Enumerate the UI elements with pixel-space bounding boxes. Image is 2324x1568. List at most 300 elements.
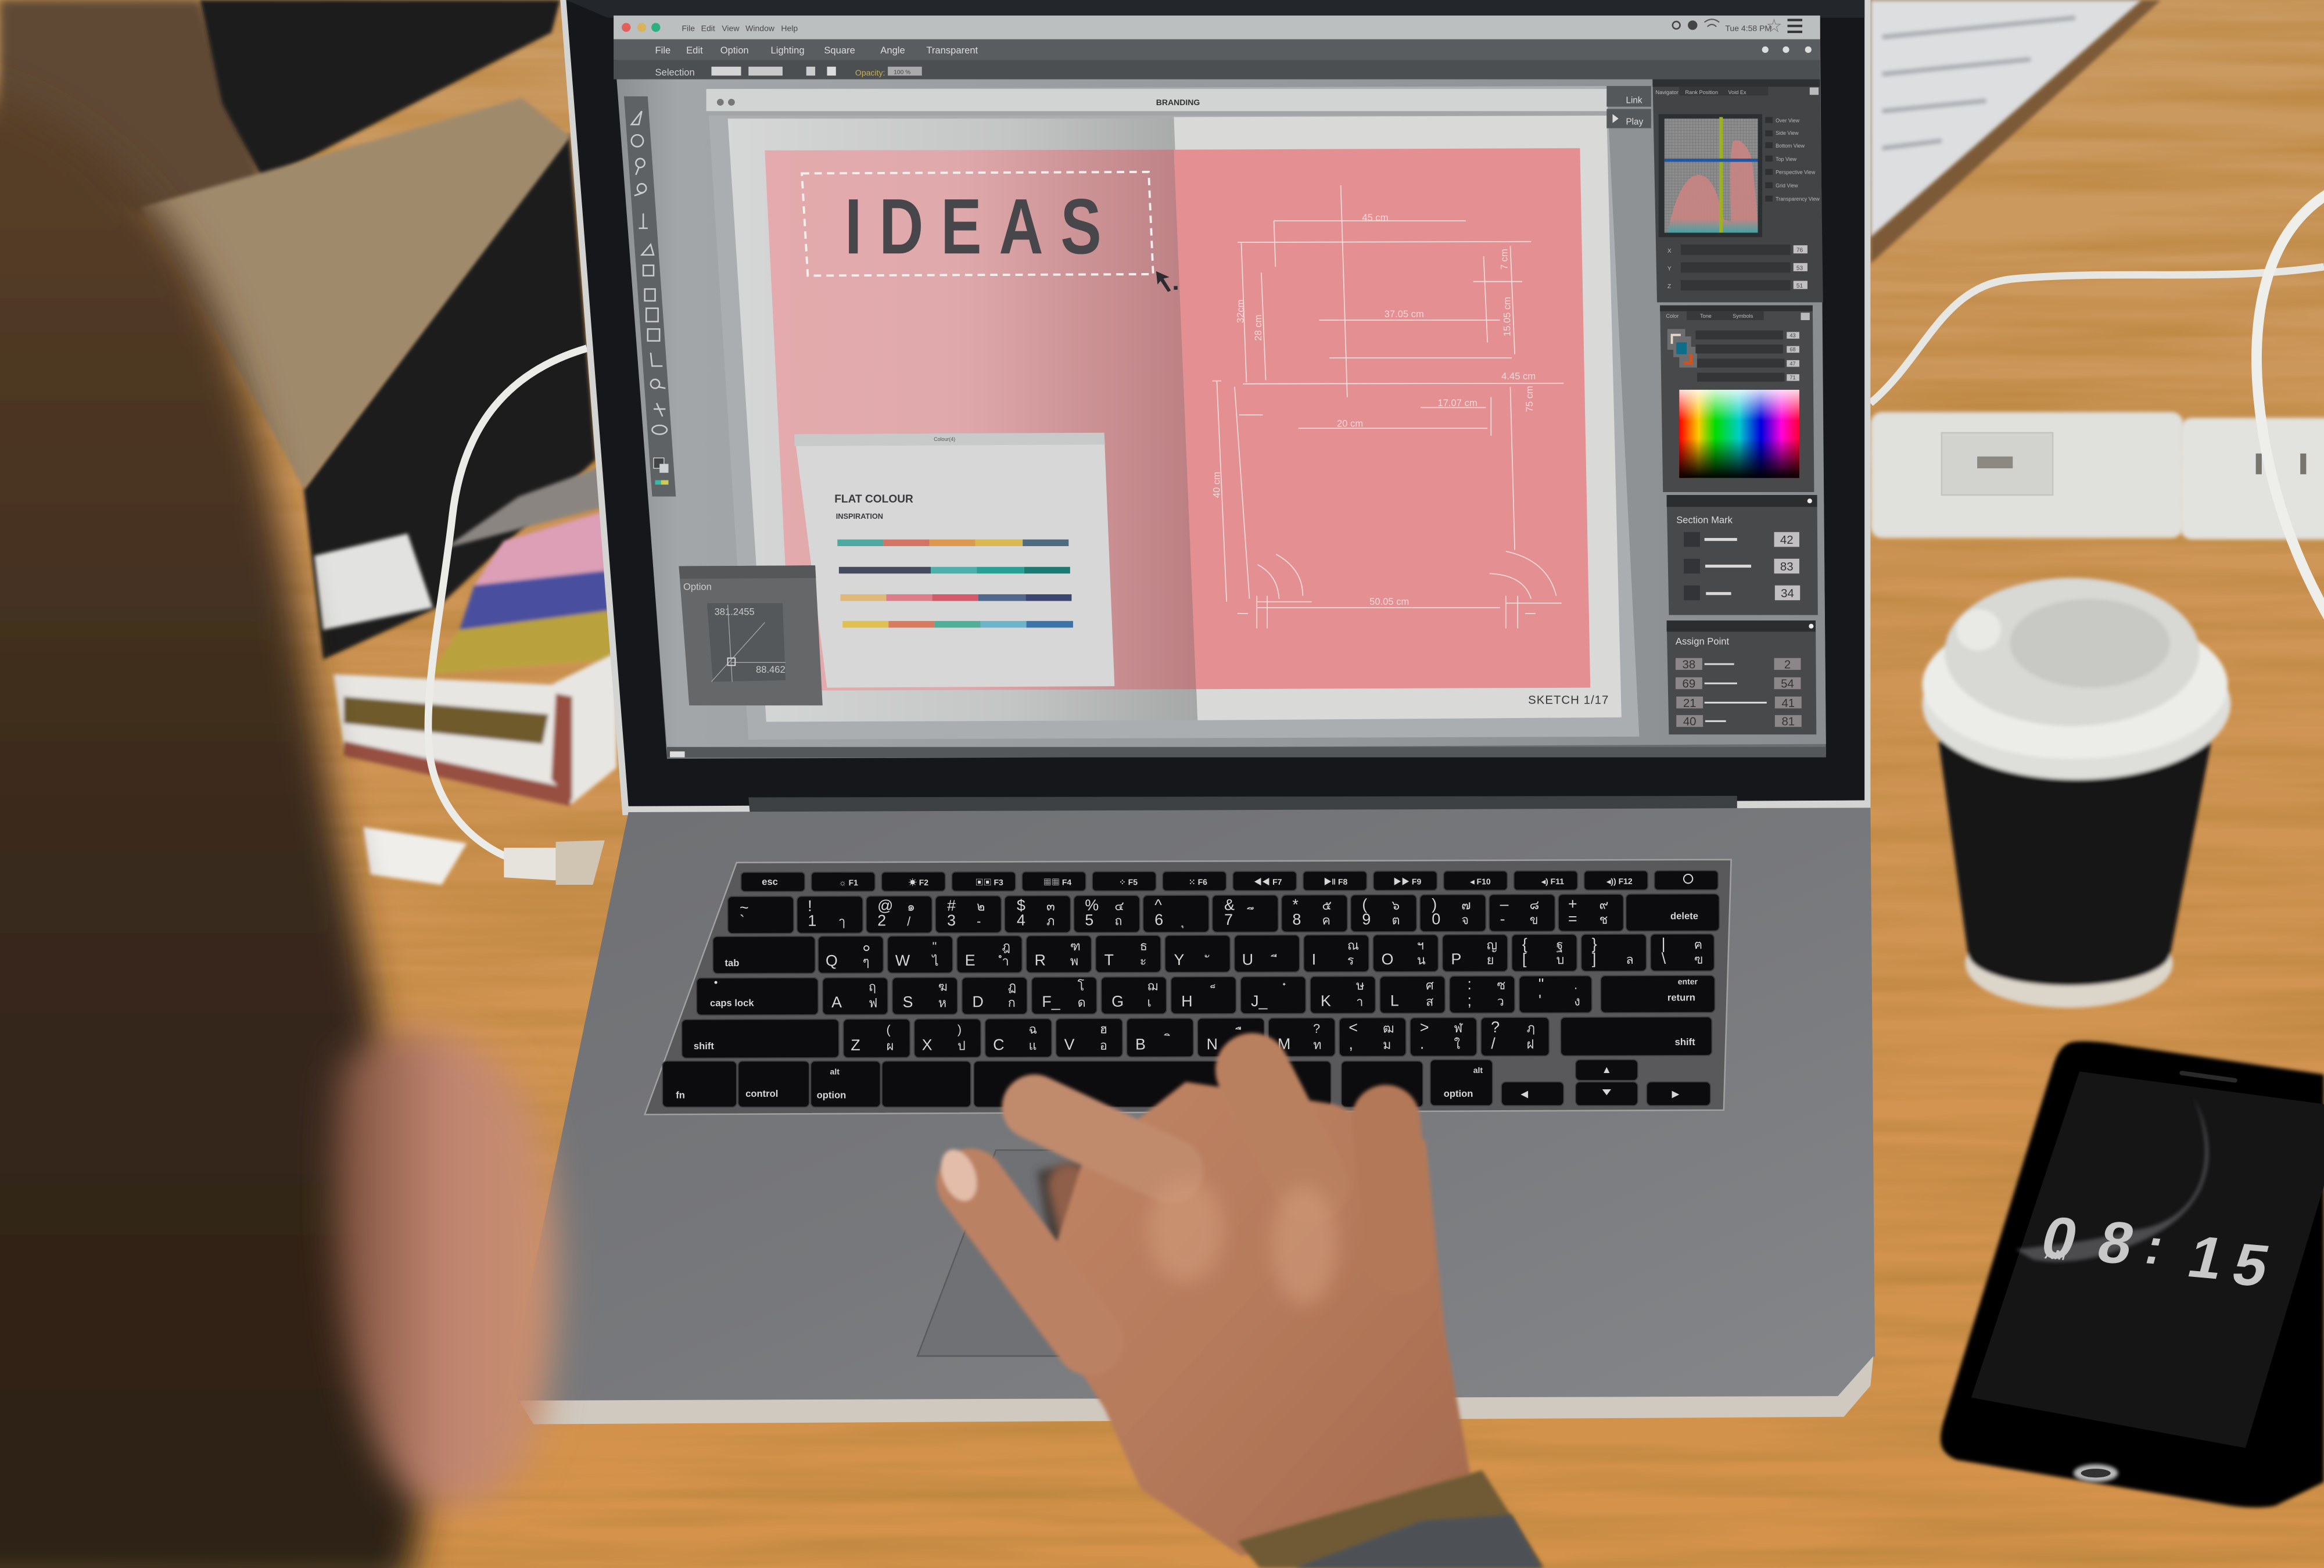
QWERTY key row: R — [1035, 952, 1046, 969]
bottom letter row: ฬ — [1454, 1021, 1464, 1035]
colour sliders — [1695, 331, 1799, 382]
assign point panel — [1667, 620, 1816, 734]
document window — [706, 86, 1639, 740]
color panel — [1660, 306, 1814, 492]
navigator panel: Rank Position — [1685, 89, 1718, 95]
modifier key row: control — [745, 1088, 778, 1099]
paper tag — [363, 827, 467, 885]
number key row: ๘ — [1530, 898, 1539, 912]
modifier key row: fn — [676, 1089, 685, 1100]
function key row: esc — [762, 876, 778, 887]
home key row: ว — [1497, 994, 1504, 1009]
number key row: = — [1568, 910, 1577, 927]
QWERTY key row: P — [1451, 950, 1461, 968]
assign point panel: 2 — [1784, 659, 1791, 672]
option panel: Option — [683, 581, 712, 592]
clock digits: 8 — [2091, 1208, 2141, 1276]
blueprint drawing: 40 cm — [1211, 472, 1222, 498]
XYZ sliders: 51 — [1796, 283, 1803, 289]
bottom letter row: . — [1420, 1035, 1424, 1052]
colour sliders: 68 — [1789, 347, 1796, 353]
system menu bar: Help — [781, 24, 798, 33]
section mark panel — [1667, 495, 1818, 615]
QWERTY key row: E — [965, 952, 975, 969]
QWERTY key row: { — [1522, 935, 1527, 953]
application menu bar: Angle — [880, 45, 905, 56]
bottom letter row: B — [1135, 1036, 1146, 1053]
bottom letter row: / — [1491, 1035, 1495, 1052]
home key row: . — [1574, 978, 1577, 992]
bottom letter row: Z — [851, 1036, 860, 1054]
system menu bar — [614, 16, 1820, 40]
link and play buttons: Link — [1626, 95, 1642, 105]
number key row: ๔ — [1114, 899, 1124, 913]
striped notebook — [430, 467, 614, 674]
home key row: ' — [1538, 992, 1541, 1009]
bottom letter row: ผ — [887, 1039, 894, 1053]
home key row: ; — [1467, 992, 1472, 1009]
flat colour card: FLAT COLOUR — [834, 493, 913, 505]
number key row: $ — [1017, 896, 1025, 914]
shadow under hand — [1038, 1156, 1127, 1304]
QWERTY key row: " — [933, 939, 937, 954]
dark brown folder top — [0, 0, 267, 215]
QWERTY key row: ย — [1487, 953, 1494, 967]
number key row: - — [1500, 910, 1505, 928]
modifier key row: alt — [1473, 1065, 1483, 1075]
laptop base — [511, 808, 1875, 1425]
blueprint drawing: 32cm — [1235, 300, 1246, 323]
XYZ sliders: 76 — [1796, 247, 1803, 254]
bottom letter row: > — [1420, 1018, 1429, 1036]
number key row: 2 — [877, 912, 886, 929]
clock digits: 0 — [2035, 1204, 2085, 1272]
number key row: ๕ — [1322, 898, 1332, 913]
bottom letter row: ฉ — [1028, 1022, 1037, 1036]
QWERTY key row: Y — [1174, 951, 1184, 968]
number key row: & — [1224, 896, 1235, 913]
assign point panel: 69 — [1683, 678, 1695, 691]
options bar: 100 % — [894, 70, 910, 76]
QWERTY key row: บ — [1556, 952, 1564, 967]
option panel — [679, 565, 823, 705]
IDEAS heading: IDEAS — [845, 182, 1119, 270]
number key row: ( — [1362, 896, 1367, 913]
brown book — [333, 652, 616, 806]
number key row: ุ — [1181, 925, 1183, 928]
home key row: ฆ — [938, 979, 948, 993]
home key row: G — [1111, 993, 1124, 1010]
assign point panel: 54 — [1781, 678, 1794, 691]
number key row: 0 — [1432, 910, 1440, 928]
XYZ sliders: 53 — [1796, 265, 1803, 271]
clock digits: 1 — [2181, 1223, 2232, 1291]
smartphone — [1941, 1041, 2324, 1526]
link and play buttons: Play — [1626, 117, 1644, 127]
number key row: 5 — [1085, 911, 1093, 929]
QWERTY key row: ร — [1347, 953, 1354, 967]
system menu bar: Tue 4:58 PM — [1725, 24, 1771, 33]
number key row: ๗ — [1461, 898, 1471, 912]
blueprint drawing — [1211, 185, 1563, 629]
bottom letter row: ฮ — [1100, 1022, 1107, 1036]
blueprint drawing: 20 cm — [1337, 418, 1363, 429]
middle finger — [1253, 1070, 1312, 1186]
XYZ sliders: Z — [1667, 284, 1671, 290]
QWERTY key row: ฃ — [1694, 952, 1703, 967]
number key row: # — [947, 897, 956, 914]
palette bar 2 — [839, 567, 1070, 573]
white charging cable — [363, 348, 605, 885]
home key row: ศ — [1426, 978, 1434, 992]
QWERTY key row: ณ — [1347, 938, 1359, 953]
navigator panel: Void Ex — [1728, 89, 1746, 95]
QWERTY key row: ฎ — [1002, 939, 1010, 953]
assign point panel: 81 — [1781, 716, 1795, 729]
trackpad — [917, 1150, 1304, 1356]
blueprint drawing: 17.07 cm — [1437, 397, 1477, 408]
modifier key row: option — [817, 1089, 846, 1100]
options bar: Selection — [655, 67, 695, 78]
XYZ sliders: Y — [1667, 266, 1672, 272]
white power strip with cables — [1870, 193, 2324, 619]
home key row: K — [1321, 992, 1331, 1010]
function key row: ▶▶ F9 — [1393, 877, 1421, 886]
sleeve cuff — [1238, 1470, 1544, 1568]
clock digits: AM — [2043, 1246, 2068, 1263]
QWERTY key row: [ — [1522, 950, 1527, 967]
number key row: ข — [1530, 912, 1538, 927]
section mark panel: 34 — [1781, 587, 1794, 600]
clock digits — [2035, 1204, 2276, 1299]
number key row: ! — [808, 897, 812, 914]
home key row: ๋ — [1282, 983, 1286, 986]
cursor arrow — [1156, 271, 1171, 292]
flat colour card: INSPIRATION — [836, 512, 883, 521]
home key row: enter — [1678, 977, 1698, 986]
system menu bar: File — [682, 24, 695, 33]
number key row: ช — [1599, 912, 1608, 927]
number key row: 6 — [1154, 911, 1163, 928]
blueprint drawing: 45 cm — [1362, 212, 1389, 223]
assign point panel: 21 — [1683, 697, 1697, 710]
QWERTY key row: พ — [1070, 953, 1078, 968]
QWERTY key row: ล — [1626, 952, 1634, 967]
QWERTY key row: I — [1312, 950, 1316, 968]
palette bar 3 — [840, 594, 1071, 601]
colour spectrum — [1679, 390, 1799, 478]
clock digits: : — [2139, 1218, 2171, 1275]
home key row: ห — [938, 995, 946, 1010]
assign point panel: 40 — [1683, 716, 1697, 729]
section mark panel: Section Mark — [1676, 515, 1733, 526]
QWERTY key row: T — [1104, 951, 1114, 968]
number key row: ๙ — [1599, 898, 1608, 912]
home key row: S — [903, 993, 913, 1011]
system menu bar: Edit — [701, 24, 715, 33]
home key row: เ — [1147, 995, 1152, 1010]
palm — [1038, 1082, 1471, 1556]
clock arc — [2015, 1097, 2208, 1262]
options bar — [614, 60, 1820, 79]
number key row: delete — [1670, 910, 1698, 921]
function key row: ◂ F10 — [1470, 877, 1491, 886]
QWERTY key row: ฑ — [1070, 939, 1081, 953]
function key row: ☀ F2 — [909, 878, 928, 887]
home key row — [697, 975, 1715, 1015]
function key row: ☼ F1 — [839, 878, 858, 887]
keyboard well — [645, 860, 1731, 1114]
home key row: ส — [1426, 994, 1433, 1009]
color panel: Tone — [1700, 313, 1712, 319]
laptop screen — [614, 16, 1826, 759]
flat colour card: Colour(4) — [934, 436, 955, 442]
color panel: Color — [1666, 313, 1679, 319]
QWERTY key row: ไ — [931, 954, 939, 968]
QWERTY key row: O — [1382, 950, 1393, 968]
bottom letter row: ิ — [1164, 1033, 1170, 1036]
navigator view list: Grid View — [1776, 183, 1798, 189]
home key row: D — [972, 993, 984, 1010]
number key row: ึ — [1247, 907, 1254, 910]
bottom letter row: C — [993, 1036, 1005, 1053]
bottom letter row: ื — [1235, 1027, 1242, 1031]
coffee cup — [1923, 578, 2230, 1008]
home key row: A — [831, 993, 842, 1011]
system menu bar: Window — [745, 24, 775, 33]
application menu bar — [614, 40, 1820, 60]
application menu bar: File — [655, 45, 670, 56]
bottom letter row: < — [1349, 1018, 1358, 1036]
black laptop in background — [200, 0, 560, 181]
number key row: @ — [877, 897, 893, 914]
application menu bar: Edit — [686, 45, 703, 56]
QWERTY key row: U — [1242, 951, 1253, 968]
bottom letter row: อ — [1100, 1038, 1107, 1053]
QWERTY key row: ะ — [1140, 953, 1146, 968]
bottom letter row: ใ — [1454, 1037, 1461, 1052]
QWERTY key row: | — [1662, 935, 1666, 952]
bottom letter row: V — [1064, 1036, 1075, 1053]
number key row: ~ — [740, 899, 749, 916]
left pink sheet — [765, 150, 1196, 691]
home key row: ซ — [1497, 978, 1505, 992]
bottom letter row: ? — [1313, 1021, 1320, 1036]
number key row: ) — [1432, 895, 1437, 913]
XYZ sliders: X — [1667, 248, 1672, 254]
modifier key row: option — [1444, 1088, 1473, 1099]
number key row: 9 — [1362, 910, 1371, 928]
front silver edge — [519, 1356, 1873, 1425]
QWERTY key row: \ — [1662, 950, 1666, 967]
home key row: return — [1667, 992, 1695, 1003]
QWERTY key row: } — [1592, 935, 1597, 953]
modifier key row: alt — [830, 1067, 840, 1077]
home key row: : — [1467, 975, 1472, 993]
tools palette — [624, 96, 676, 497]
QWERTY key row: ฅ — [1694, 937, 1702, 952]
blueprint drawing: 15.05 cm — [1501, 297, 1512, 336]
application menu bar: Square — [824, 45, 855, 56]
number key row: + — [1568, 895, 1577, 913]
home key row: ฤ — [869, 979, 876, 994]
colour sliders: 43 — [1789, 332, 1796, 338]
navigator view list: Perspective View — [1776, 170, 1816, 175]
assign point panel: 38 — [1683, 659, 1695, 672]
hair — [0, 81, 430, 1568]
number key row: ภ — [1046, 914, 1055, 928]
section mark panel: 83 — [1780, 561, 1794, 573]
QWERTY key row: Q — [826, 952, 838, 970]
bottom letter row: แ — [1028, 1038, 1037, 1053]
navigator view list: Bottom View — [1776, 143, 1805, 149]
home key row: " — [1538, 975, 1544, 993]
number key row: 3 — [947, 912, 956, 929]
navigator view list: Transparency View — [1776, 196, 1820, 202]
QWERTY key row: ๐ — [863, 939, 870, 954]
right page — [1174, 116, 1622, 720]
thumb — [971, 1183, 1089, 1341]
back finger — [1070, 1186, 1089, 1260]
number key row: 7 — [1224, 911, 1233, 928]
QWERTY key row: ั — [1204, 955, 1210, 957]
function key row: ⁙ F6 — [1189, 877, 1207, 887]
XYZ sliders — [1667, 245, 1807, 290]
black binder — [304, 134, 596, 659]
QWERTY key row — [713, 934, 1715, 974]
option panel: 381.2455 — [715, 607, 755, 618]
home key row: ็ — [1210, 983, 1215, 988]
number key row: * — [1292, 896, 1299, 913]
blueprint drawing: 4.45 cm — [1501, 371, 1536, 382]
home key row: J_ — [1251, 992, 1268, 1010]
section mark panel: 42 — [1780, 534, 1794, 547]
number key row: / — [907, 914, 911, 928]
QWERTY key row: ฯ — [1417, 938, 1424, 952]
navigator view list: Top View — [1776, 156, 1797, 162]
right desk: paper sheets — [1870, 0, 2161, 264]
number key row: จ — [1461, 913, 1469, 927]
function key row: ▦▦ F4 — [1043, 877, 1071, 887]
bottom letter row: ( — [886, 1022, 891, 1037]
application menu bar: Transparent — [926, 45, 978, 56]
application menu bar: Lighting — [771, 45, 805, 56]
QWERTY key row: tab — [725, 957, 739, 968]
home key row: า — [1356, 995, 1363, 1009]
ear and neck skin — [335, 1032, 557, 1505]
number key row: ค — [1322, 913, 1330, 927]
color panel: Symbols — [1733, 313, 1753, 319]
number key row: 1 — [808, 912, 816, 930]
number key row: ต — [1391, 913, 1400, 927]
bottom letter row: shift — [694, 1040, 714, 1052]
flat colour card — [794, 433, 1114, 688]
blueprint drawing: 28 cm — [1253, 315, 1264, 341]
left page — [728, 119, 1197, 722]
home key row: ง — [1574, 994, 1580, 1009]
number key row: ๑ — [907, 899, 915, 914]
blueprint drawing: 50.05 cm — [1369, 596, 1409, 607]
home key row: H — [1181, 992, 1193, 1010]
bottom letter row: ) — [957, 1022, 962, 1036]
QWERTY key row: ธ — [1140, 939, 1147, 953]
knuckle highlights — [1149, 1178, 1337, 1304]
QWERTY key row: ี — [1271, 954, 1277, 957]
option panel: 88.462 — [756, 664, 786, 675]
modifier key row — [662, 1060, 1710, 1107]
home key row: ฟ — [869, 996, 877, 1010]
bottom letter row: ฦ — [1526, 1021, 1535, 1035]
number key row: – — [1500, 895, 1509, 913]
bottom scrollbar — [667, 747, 1826, 758]
hand on trackpad — [934, 1070, 1544, 1568]
bottom letter row — [682, 1017, 1712, 1058]
navigator view list: Side View — [1776, 130, 1799, 136]
options bar: Opacity: — [855, 68, 885, 77]
number key row: ๒ — [977, 899, 985, 913]
function key row: ◂)) F12 — [1606, 877, 1633, 886]
grey sweater — [1294, 1515, 1541, 1568]
application menu bar: Option — [720, 45, 749, 56]
number key row: % — [1085, 896, 1099, 914]
bottom letter row: ท — [1313, 1038, 1322, 1052]
dashed selection box — [802, 172, 1153, 275]
function key row: ▣▣ F3 — [975, 878, 1003, 887]
document window: BRANDING — [1156, 98, 1200, 107]
blueprint drawing: 37.05 cm — [1385, 308, 1424, 320]
tan binder cover — [141, 98, 571, 489]
palette bar 4 — [842, 621, 1073, 627]
function key row: ⁘ F5 — [1119, 877, 1138, 887]
navigator panel — [1652, 79, 1823, 302]
clock digits: 5 — [2226, 1231, 2276, 1299]
assign point panel: Assign Point — [1676, 636, 1729, 647]
laptop hinge — [748, 796, 1737, 831]
bottom letter row: , — [1349, 1035, 1353, 1053]
number key row: ๓ — [1046, 899, 1055, 913]
home key row: ษ — [1356, 978, 1364, 993]
QWERTY key row: น — [1417, 953, 1426, 967]
bottom letter row: ป — [957, 1038, 966, 1053]
blueprint drawing: 7 cm — [1498, 249, 1509, 270]
navigator view list — [1765, 117, 1820, 202]
QWERTY key row: ฐ — [1556, 938, 1563, 953]
left desk clutter: folders and books — [0, 0, 616, 806]
home key row: caps lock — [710, 998, 754, 1009]
home key row: โ — [1078, 979, 1085, 993]
number key row: 8 — [1292, 911, 1301, 928]
number key row: 4 — [1017, 912, 1025, 929]
colour sliders: 71 — [1789, 375, 1796, 381]
link and play buttons — [1606, 86, 1651, 128]
bottom letter row: ฒ — [1383, 1021, 1394, 1035]
QWERTY key row: W — [895, 952, 910, 969]
sketch page label: SKETCH 1/17 — [1528, 694, 1609, 707]
laptop lid — [560, 0, 1870, 815]
QWERTY key row: ๆ — [863, 954, 869, 968]
home key row: F_ — [1042, 993, 1061, 1010]
bottom letter row: ฝ — [1527, 1037, 1534, 1052]
navigator view list: Over View — [1776, 117, 1800, 123]
function key row: ◀◀ F7 — [1254, 877, 1282, 887]
index finger — [1035, 1107, 1171, 1171]
number key row — [727, 894, 1719, 934]
right pink sheet — [1174, 148, 1590, 689]
home key row: ด — [1078, 995, 1086, 1010]
navigator graph — [1659, 114, 1762, 237]
number key row: - — [977, 914, 981, 928]
bottom letter row: N — [1207, 1035, 1218, 1053]
